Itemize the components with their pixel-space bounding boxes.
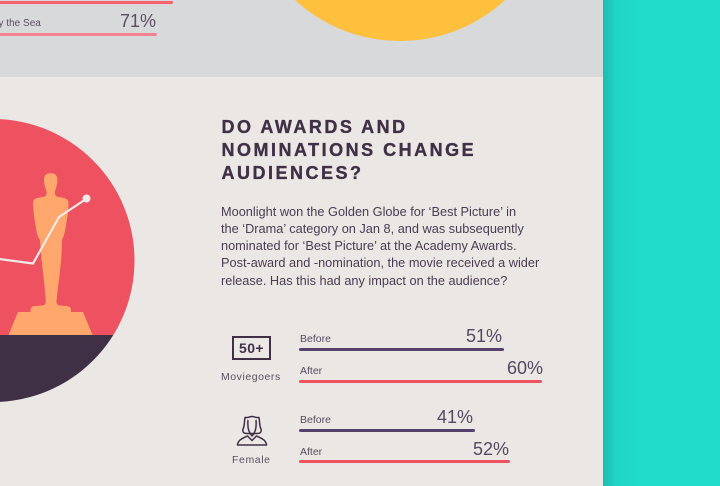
label: Before [300, 414, 331, 426]
heading [222, 117, 476, 183]
body text [221, 204, 540, 288]
top bar [0, 1, 173, 4]
percent: 71: 71% [120, 11, 156, 31]
label: female: Female [232, 454, 271, 466]
illustration: oscar circle [0, 119, 134, 402]
icon: oscar statue [8, 173, 92, 335]
group: moviegoers icon [221, 336, 281, 383]
icon: woman [236, 416, 268, 446]
body text: Moonlight won the Golden Globe for ‘Best Picture’ in [221, 204, 516, 218]
label: After [300, 365, 322, 377]
heading: AUDIENCES? [222, 163, 364, 183]
label: After [300, 446, 322, 458]
panel: awards section [0, 77, 603, 486]
heading: NOMINATIONS CHANGE [222, 140, 476, 160]
icon: yellow circle [245, 0, 555, 41]
label: Before [300, 333, 331, 345]
bar [299, 348, 504, 351]
group: female before [299, 407, 475, 432]
label: moviegoers: Moviegoers [221, 371, 281, 383]
line chart [0, 199, 86, 264]
bar: 71 [0, 33, 157, 36]
body text: Post-award and -nomination, the movie received a wider [221, 255, 539, 270]
bar [299, 460, 510, 463]
percent: 51% [466, 326, 502, 346]
group: female icon [232, 416, 271, 466]
icon: 50+: 50+ [239, 340, 264, 356]
body text: nominated for ‘Best Picture’ at the Academy Awards. [221, 238, 517, 253]
percent: 52% [473, 439, 509, 459]
panel: top grey section [0, 0, 603, 77]
dark ground [0, 335, 114, 402]
heading: DO AWARDS AND [222, 117, 408, 137]
percent: 41% [437, 407, 473, 427]
teal side background [603, 0, 720, 486]
body text: release. Has this had any impact on the audience? [221, 273, 507, 288]
bar [299, 429, 475, 432]
group: 50+ after [299, 358, 543, 383]
group: 50+ before [299, 326, 504, 351]
percent: 60% [507, 358, 543, 378]
red circle [0, 119, 134, 335]
body text: the ‘Drama’ category on Jan 8, and was subsequently [221, 221, 524, 236]
icon: 50+ [232, 336, 271, 360]
group: female after [299, 439, 510, 463]
bar [299, 380, 542, 383]
line marker [82, 194, 90, 202]
